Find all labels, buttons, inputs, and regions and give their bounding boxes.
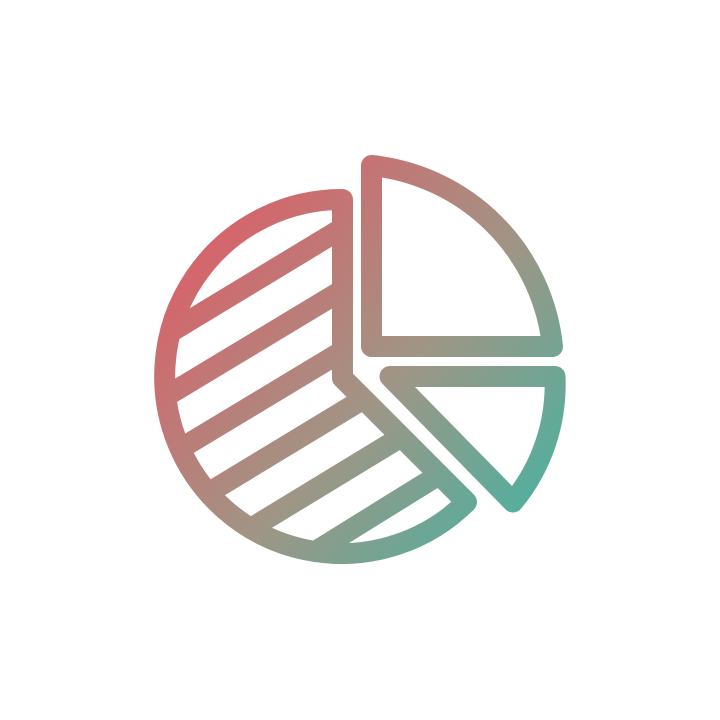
large hatched slice	[150, 199, 466, 561]
top right quarter slice	[372, 166, 552, 346]
icon: gradient pie chart	[154, 155, 566, 564]
large slice outline	[165, 199, 466, 553]
lower right small slice	[390, 376, 555, 502]
hatch lines	[175, 222, 438, 544]
